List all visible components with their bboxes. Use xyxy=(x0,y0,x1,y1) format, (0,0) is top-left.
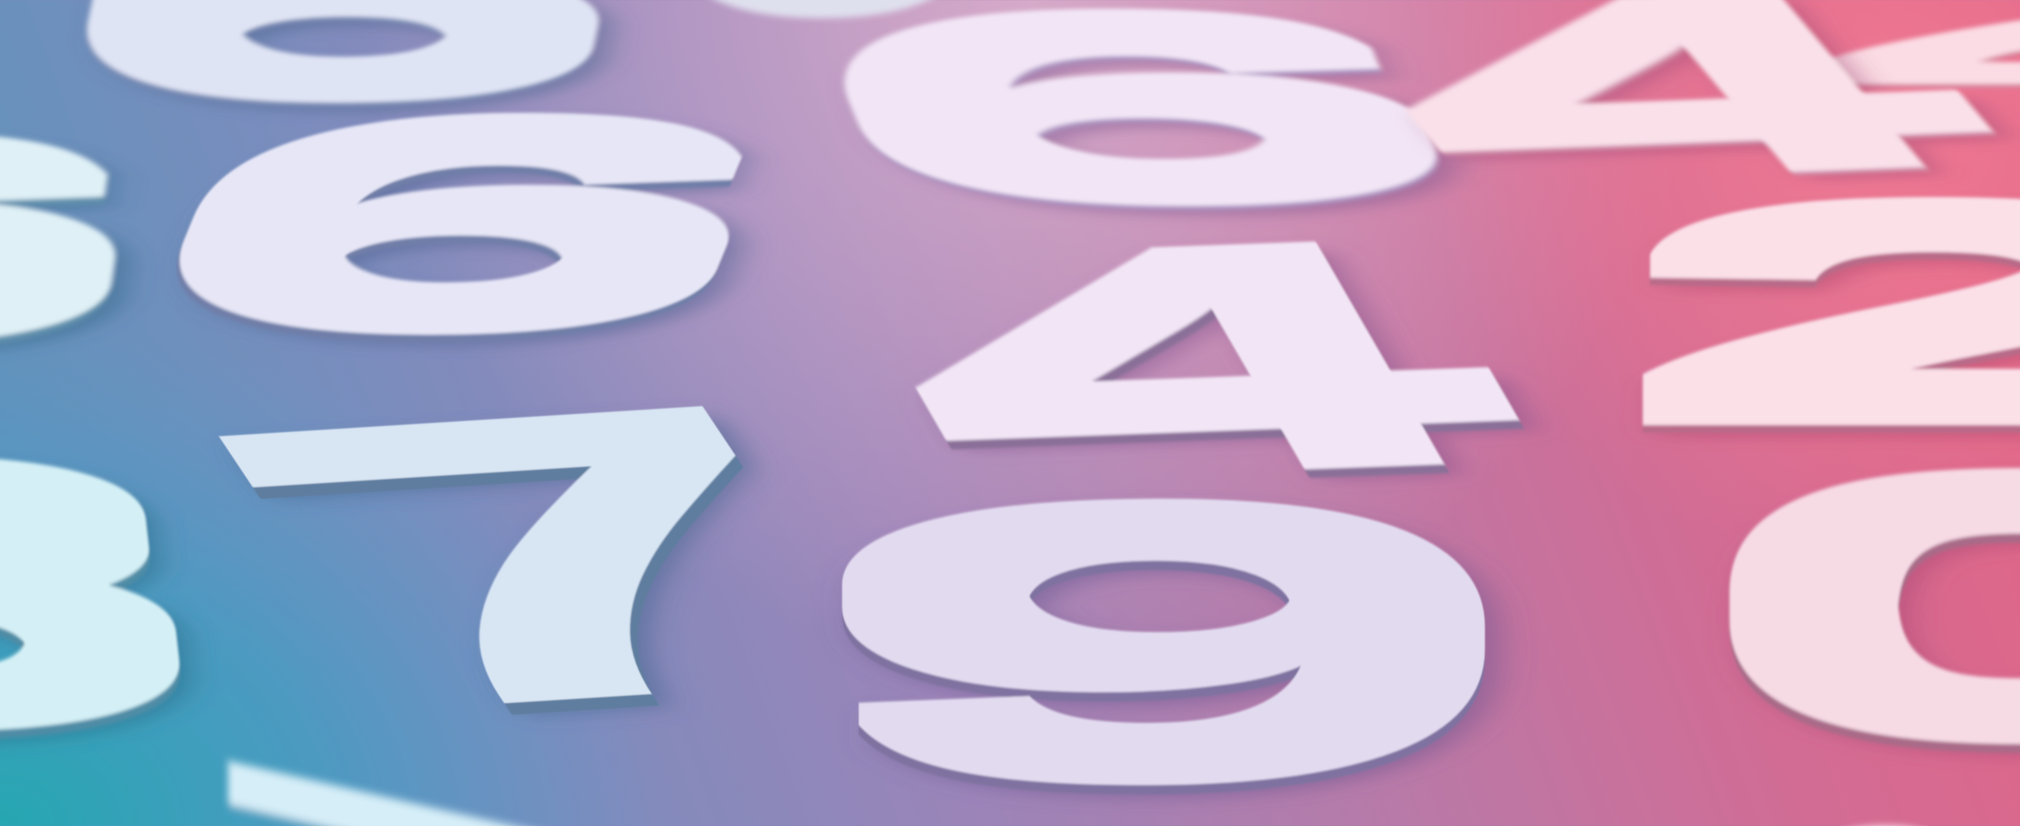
digit 6 large upper left: 6 xyxy=(98,75,854,391)
digit 7: 7 xyxy=(121,323,982,791)
digit 7: 7 xyxy=(139,334,1000,802)
digit 4 centre: 4 xyxy=(795,186,1584,532)
digit 4 centre: 4 xyxy=(800,195,1589,540)
digit 6 large upper left: 6 xyxy=(85,65,841,381)
digit 7: 7 xyxy=(129,334,990,802)
digit 4 centre: 4 xyxy=(812,196,1600,542)
digit 6 large upper left: 6 xyxy=(82,72,839,388)
